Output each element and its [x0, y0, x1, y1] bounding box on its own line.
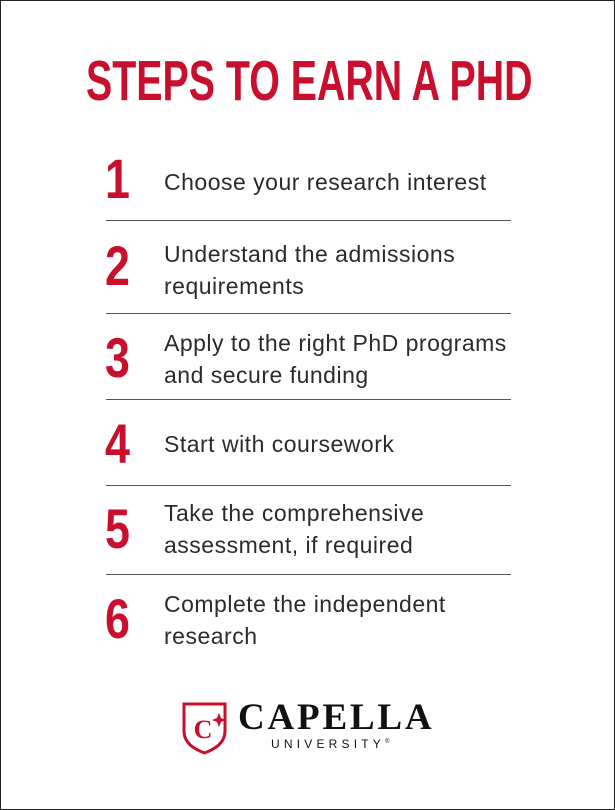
step 3 text: Apply to the right PhD programs — [164, 330, 507, 356]
step 1 text: Choose your research interest — [164, 169, 487, 195]
step 3 text — [164, 330, 507, 388]
step 4 text: Start with coursework — [164, 431, 394, 457]
step 3 number: 3 — [105, 326, 130, 389]
step 5 number: 5 — [105, 497, 130, 560]
step 6 text: Complete the independent — [164, 591, 446, 617]
step 6 text — [164, 591, 446, 649]
step 4 number: 4 — [105, 412, 130, 475]
icon: shield: C — [194, 715, 212, 744]
logo — [182, 697, 434, 755]
step 2 text: Understand the admissions — [164, 241, 455, 267]
step 2 number: 2 — [105, 234, 130, 297]
step 6 number: 6 — [105, 587, 130, 650]
step 1 number: 1 — [105, 147, 130, 210]
step 6 text: research — [164, 623, 257, 649]
title: STEPS TO EARN A PHD — [86, 49, 533, 113]
wordmark: CAPELLA — [238, 697, 434, 738]
step 2 text — [164, 241, 455, 299]
step 5 text: Take the comprehensive — [164, 500, 424, 526]
step 5 text: assessment, if required — [164, 532, 413, 558]
icon: shield — [182, 702, 226, 755]
logo: UNIVERSITY® — [271, 737, 394, 751]
step 5 text — [164, 500, 424, 558]
step 2 text: requirements — [164, 273, 304, 299]
step 3 text: and secure funding — [164, 362, 369, 388]
